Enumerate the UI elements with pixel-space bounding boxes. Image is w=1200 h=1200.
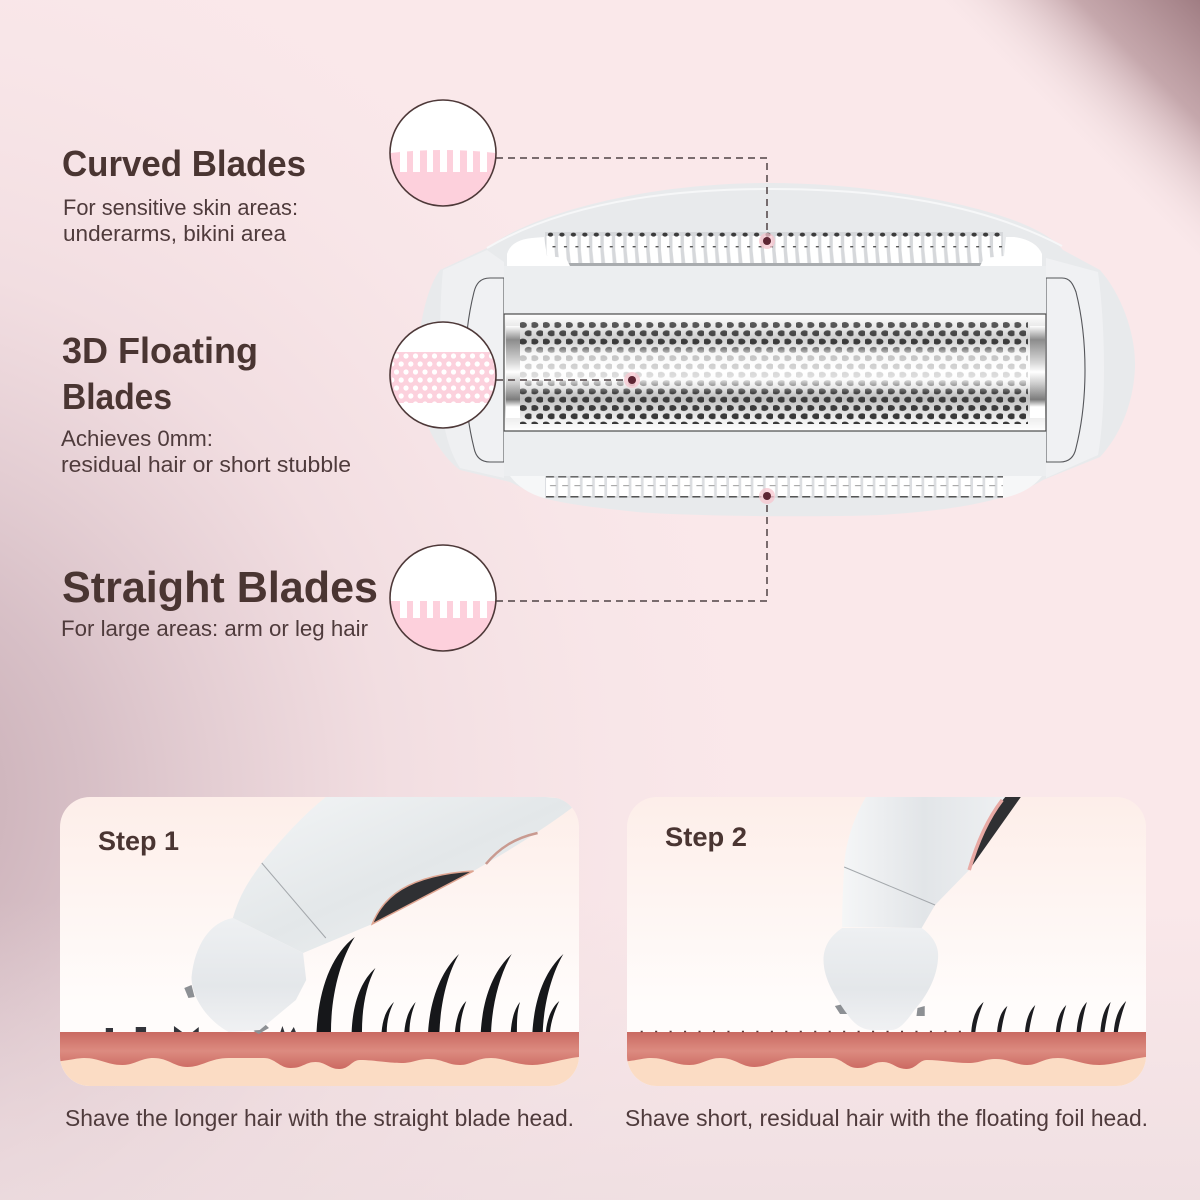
stubble row	[641, 1030, 969, 1032]
heading: curved blades: Curved Blades	[62, 143, 306, 184]
skin layer	[617, 1032, 1163, 1069]
description: curved blades: For sensitive skin areas:	[63, 195, 298, 220]
callout line: floating blades	[496, 379, 632, 381]
step 2 scene	[641, 797, 1126, 1032]
fat layer	[60, 1057, 579, 1086]
shaver head	[824, 928, 938, 1030]
description: straight blades: For large areas: arm or leg hair	[61, 616, 368, 641]
cut stubble	[106, 1026, 296, 1032]
handle seam	[262, 863, 326, 938]
step 2 label: Step 2	[665, 822, 747, 852]
dark button strip	[372, 871, 474, 924]
callout line: curved blades	[496, 158, 767, 240]
callout line: straight blades	[496, 497, 767, 601]
handle	[233, 797, 577, 953]
step 1 label: Step 1	[98, 826, 179, 856]
short hairs	[971, 1001, 1126, 1032]
left body shell	[440, 250, 504, 478]
metal clips	[184, 985, 269, 1034]
metal clips	[835, 1004, 925, 1016]
heading: 3D floating blades: 3D Floating	[62, 330, 258, 371]
marker dot: curved blades	[759, 233, 775, 249]
marker dot: straight blades	[759, 488, 775, 504]
icon: curved blade circle	[390, 100, 496, 206]
panel: step 2	[617, 797, 1163, 1086]
right side panel	[1046, 278, 1085, 462]
head silhouette	[417, 183, 1135, 516]
handle	[842, 797, 1005, 928]
shaver head product illustration	[417, 183, 1135, 516]
step 2 caption: Shave short, residual hair with the floating foil head.	[625, 1105, 1148, 1131]
step 1 scene	[50, 797, 596, 1069]
curved blades comb	[545, 232, 1005, 266]
icon: floating foil circle	[390, 322, 496, 428]
icon: straight blade circle	[390, 545, 496, 651]
curved blade right corner	[980, 237, 1042, 266]
curved blade left corner	[507, 237, 570, 266]
description: 3D floating blades: Achieves 0mm:	[61, 426, 213, 451]
fat layer	[627, 1057, 1146, 1086]
description: curved blades: underarms, bikini area	[63, 221, 287, 246]
step 1 caption: Shave the longer hair with the straight blade head.	[65, 1105, 574, 1131]
rose trim	[969, 800, 1002, 870]
panel background	[627, 800, 1146, 1032]
marker dot: floating blades	[624, 372, 640, 388]
shaver head	[192, 918, 306, 1032]
long hairs	[317, 937, 563, 1032]
dark button strip	[972, 797, 1021, 866]
heading: straight blades: Straight Blades	[62, 563, 378, 612]
rose trim	[486, 833, 538, 864]
head rim highlight	[487, 189, 1062, 248]
center housing bar	[504, 266, 1046, 476]
3D floating foil	[504, 314, 1046, 431]
panel background	[60, 797, 579, 1086]
description: 3D floating blades: residual hair or short stubble	[61, 452, 351, 477]
left side panel	[465, 278, 504, 462]
handle seam	[844, 867, 935, 905]
straight blades comb	[510, 476, 1042, 498]
right body shell	[1046, 258, 1104, 478]
panel: step 1	[50, 797, 596, 1086]
heading: 3D floating blades: Blades	[62, 376, 172, 417]
skin layer	[50, 1032, 596, 1069]
